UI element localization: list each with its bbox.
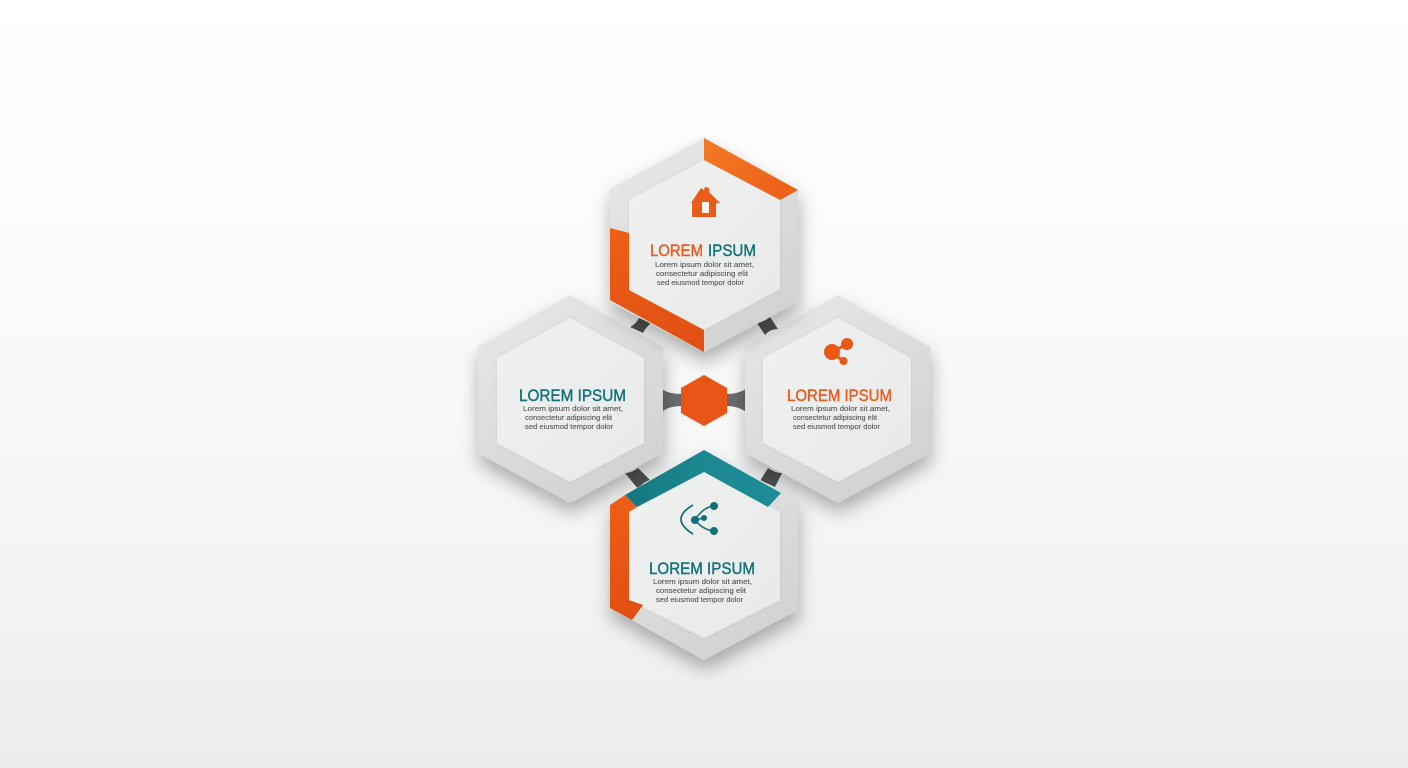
text block: sed eiusmod tempor dolor xyxy=(793,422,880,431)
icon: network nodes xyxy=(681,502,718,535)
text block: Lorem ipsum dolor sit amet, xyxy=(655,260,754,269)
connector: top hex to left hex xyxy=(630,318,651,333)
panel: top hexagon xyxy=(610,138,798,352)
connector: top hex to right hex xyxy=(757,317,778,335)
text block: Lorem ipsum dolor sit amet, xyxy=(653,577,752,586)
heading: LOREM IPSUM xyxy=(787,387,892,405)
panel: bottom hexagon xyxy=(610,450,798,660)
text block xyxy=(523,404,623,431)
icon: house xyxy=(691,187,720,217)
text block: sed eiusmod tempor dolor xyxy=(656,595,743,604)
text block: consectetur adipiscing elit xyxy=(656,269,749,278)
text block: Lorem ipsum dolor sit amet, xyxy=(791,404,890,413)
accent: teal top band xyxy=(625,450,781,507)
text block: sed eiusmod tempor dolor xyxy=(525,422,613,431)
icon: share nodes xyxy=(824,338,853,365)
accent: orange left band xyxy=(610,495,643,620)
panel: right hexagon xyxy=(745,295,930,503)
text block: consectetur adipiscing elit xyxy=(656,586,747,595)
text block xyxy=(791,404,890,431)
connectors xyxy=(625,317,782,489)
center hexagon xyxy=(681,375,727,426)
text block: consectetur adipiscing elit xyxy=(793,413,878,422)
heading: LOREM xyxy=(650,242,703,260)
connector: left hex to bottom hex xyxy=(625,468,650,489)
accent: orange top right band xyxy=(704,138,798,200)
heading xyxy=(650,242,756,260)
text block: sed eiusmod tempor dolor xyxy=(657,278,744,287)
text block xyxy=(655,260,754,287)
connector: right hex to center xyxy=(726,389,746,412)
connector: right hex to bottom hex xyxy=(760,468,782,487)
heading: IPSUM xyxy=(708,242,756,260)
accent: orange left band xyxy=(610,228,704,352)
heading: LOREM IPSUM xyxy=(519,387,626,405)
panel: left hexagon xyxy=(478,295,663,503)
text block: consectetur adipiscing elit xyxy=(525,413,613,422)
connector: left hex to center xyxy=(662,389,683,412)
heading: LOREM IPSUM xyxy=(649,560,755,578)
text block: Lorem ipsum dolor sit amet, xyxy=(523,404,623,413)
text block xyxy=(653,577,752,604)
